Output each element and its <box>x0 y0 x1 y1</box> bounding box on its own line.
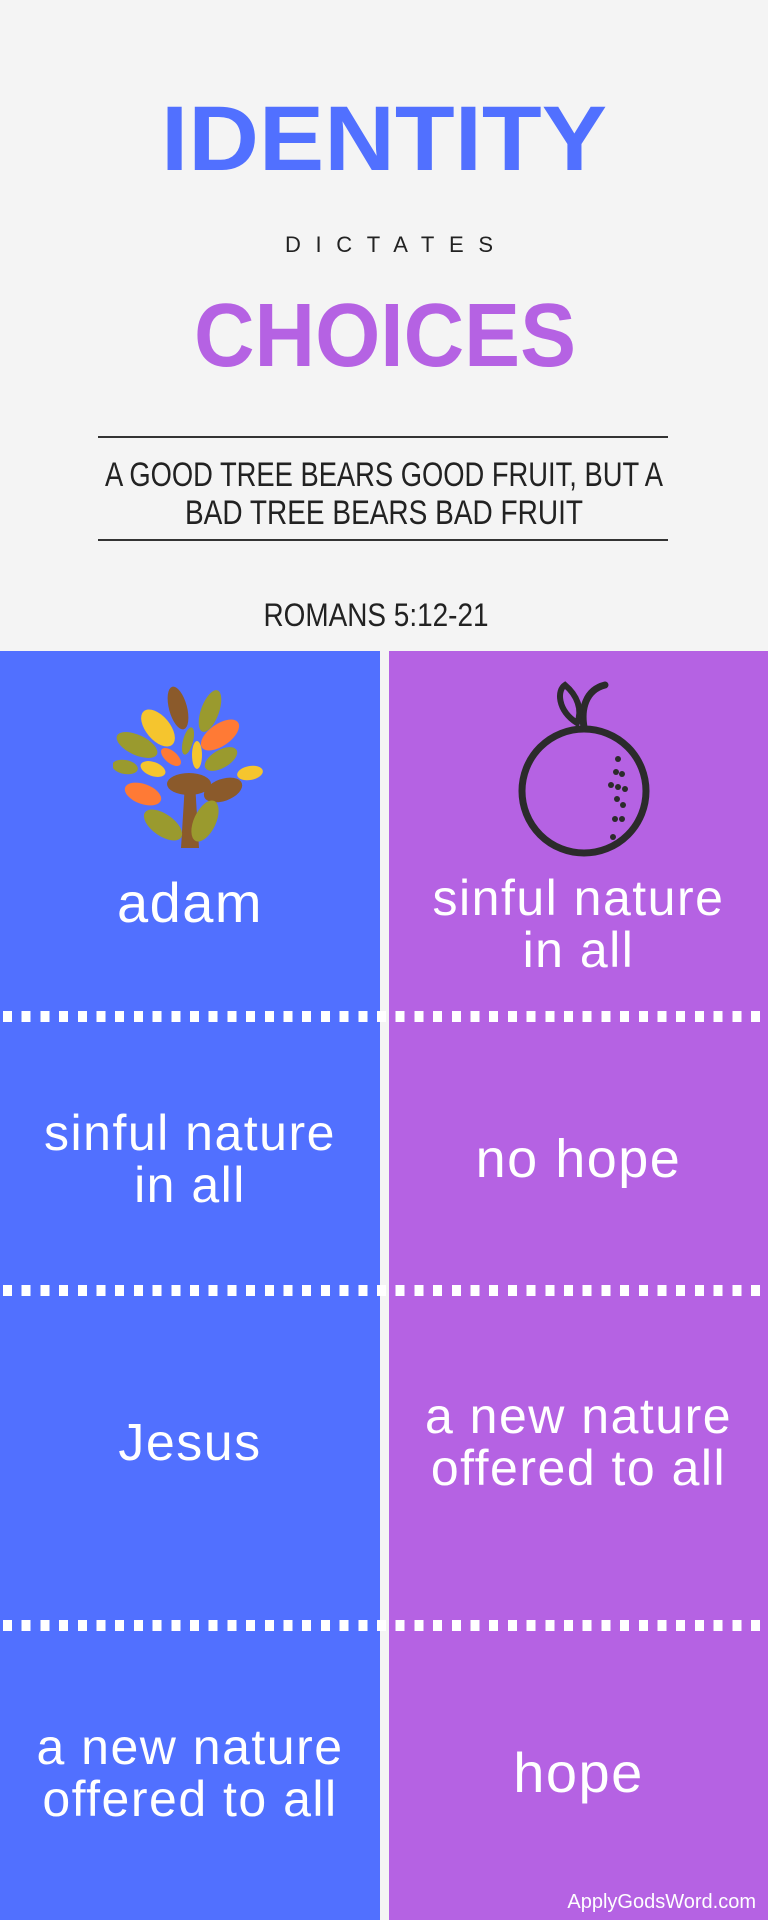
footer credit: ApplyGodsWord.com <box>567 1891 756 1913</box>
header <box>98 88 668 633</box>
text: sinful nature in all: in all <box>134 1157 246 1213</box>
icon: fruit <box>518 681 650 856</box>
text: sinful nature in all <box>433 870 724 978</box>
text: Jesus: Jesus <box>118 1414 262 1472</box>
title: CHOICES: CHOICES <box>194 286 576 386</box>
subtitle: DICTATES: DICTATES <box>285 232 501 257</box>
text: no hope: no hope <box>476 1129 681 1189</box>
text: a new nature offered to all <box>36 1719 344 1827</box>
text: sinful nature in all: sinful nature <box>433 870 724 926</box>
text: sinful nature in all <box>44 1105 336 1213</box>
text: a new nature offered to all <box>425 1388 732 1496</box>
panel: left column <box>0 651 380 1920</box>
text: a new nature offered to all: offered to all <box>42 1771 338 1827</box>
panel: right column <box>389 651 768 1920</box>
text: sinful nature in all: sinful nature <box>44 1105 336 1161</box>
text: a new nature offered to all: offered to all <box>431 1440 726 1496</box>
text: adam: adam <box>117 871 263 934</box>
reference: ROMANS 5:12-21 <box>264 597 488 633</box>
text: sinful nature in all: in all <box>523 922 634 978</box>
text: hope: hope <box>513 1741 644 1804</box>
text: a new nature offered to all: a new nature <box>36 1719 344 1775</box>
text: a new nature offered to all: a new nature <box>425 1388 732 1444</box>
quote <box>105 456 663 532</box>
icon: tree <box>113 686 263 848</box>
quote: BAD TREE BEARS BAD FRUIT <box>185 494 583 532</box>
title: IDENTITY: IDENTITY <box>161 88 607 190</box>
